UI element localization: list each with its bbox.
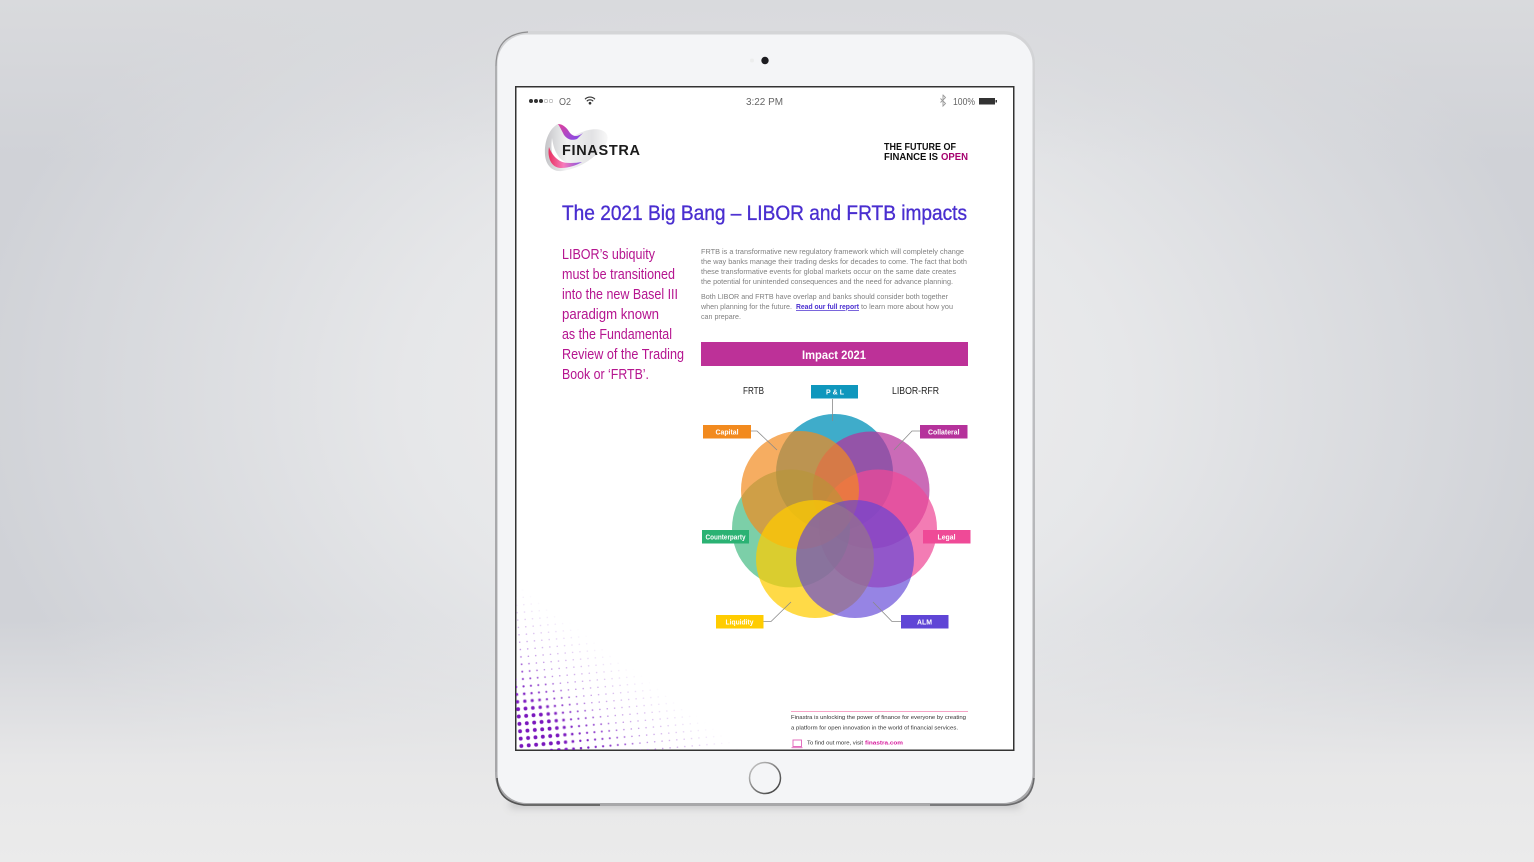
label: ALM: [901, 615, 948, 628]
tagline: THE FUTURE OF: [884, 142, 956, 153]
status bar: [529, 95, 997, 108]
footer statement: [791, 715, 966, 732]
label: Capital: Capital: [716, 430, 739, 436]
call to action: finastra.com: [865, 740, 903, 746]
tagline: FINANCE IS: [884, 152, 938, 163]
body text: the potential for unintended consequences and the need for advance planning.: [701, 277, 953, 286]
intro pull quote: as the Fundamental: [562, 327, 672, 343]
label: Liquidity: [716, 615, 764, 628]
label: ALM: ALM: [917, 620, 932, 626]
logo: Finastra: [545, 124, 641, 171]
icon: camera: [750, 57, 769, 64]
label: Counterparty: Counterparty: [706, 534, 746, 542]
footer: [791, 712, 968, 748]
venn diagram: [702, 385, 970, 628]
label: Capital: [703, 425, 751, 438]
icon: bluetooth: [940, 95, 946, 106]
icon: home button: [750, 762, 780, 794]
label: Counterparty: [702, 530, 749, 544]
intro pull quote: paradigm known: [562, 307, 659, 323]
body text: can prepare.: [701, 312, 741, 321]
tablet screen: [516, 87, 1014, 752]
icon: wifi: [585, 97, 595, 104]
body text: these transformative events for global markets occur on the same date creates: [701, 267, 956, 276]
intro pull quote: [562, 247, 684, 383]
footer statement: a platform for open innovation in the world of financial services.: [791, 726, 958, 732]
label: Liquidity: Liquidity: [726, 620, 754, 626]
tagline: OPEN: [941, 152, 968, 163]
body text: Both LIBOR and FRTB have overlap and banks should consider both together: [701, 292, 949, 301]
banner: Impact 2021: Impact 2021: [802, 350, 867, 362]
body text: the way banks manage their trading desks for decades to come. The fact that both: [701, 257, 967, 266]
intro pull quote: LIBOR’s ubiquity: [562, 247, 656, 263]
clock: 3:22 PM: [746, 96, 783, 108]
call to action: To find out more, visit: [807, 740, 863, 746]
leader lines: [751, 399, 920, 622]
footer statement: Finastra is unlocking the power of finance for everyone by creating: [791, 715, 966, 721]
title: The 2021 Big Bang – LIBOR and FRTB impacts: [562, 202, 967, 225]
call to action: [807, 740, 903, 746]
intro pull quote: Review of the Trading: [562, 347, 684, 363]
label: Collateral: Collateral: [928, 430, 960, 436]
heading: LIBOR-RFR: LIBOR-RFR: [892, 386, 939, 397]
intro pull quote: must be transitioned: [562, 267, 675, 283]
intro pull quote: into the new Basel III: [562, 287, 678, 303]
logo wordmark: FINASTRA: [562, 143, 641, 159]
icon: battery: [979, 98, 997, 104]
battery percent: 100%: [953, 97, 975, 108]
signal dots: [529, 99, 553, 103]
circles: [732, 414, 937, 618]
tagline: [884, 142, 968, 163]
body text: Read our full report: [796, 302, 860, 311]
label: P&L: P&L: [826, 390, 845, 396]
icon: laptop: [792, 740, 802, 748]
banner: Impact 2021: [701, 342, 968, 366]
label: P&L: [811, 385, 858, 398]
body text: FRTB is a transformative new regulatory framework which will completely change: [701, 247, 964, 256]
body text: when planning for the future.: [700, 302, 792, 311]
tablet device: [495, 31, 1035, 808]
body text: [700, 247, 967, 321]
body text: to learn more about how you: [861, 302, 953, 311]
label: Legal: [923, 530, 970, 544]
label: Collateral: [920, 425, 968, 438]
carrier: O2: [559, 97, 571, 108]
halftone dot pattern: [516, 596, 730, 750]
heading: FRTB: FRTB: [743, 386, 764, 397]
label: Legal: Legal: [938, 534, 956, 542]
intro pull quote: Book or ‘FRTB’.: [562, 367, 649, 383]
